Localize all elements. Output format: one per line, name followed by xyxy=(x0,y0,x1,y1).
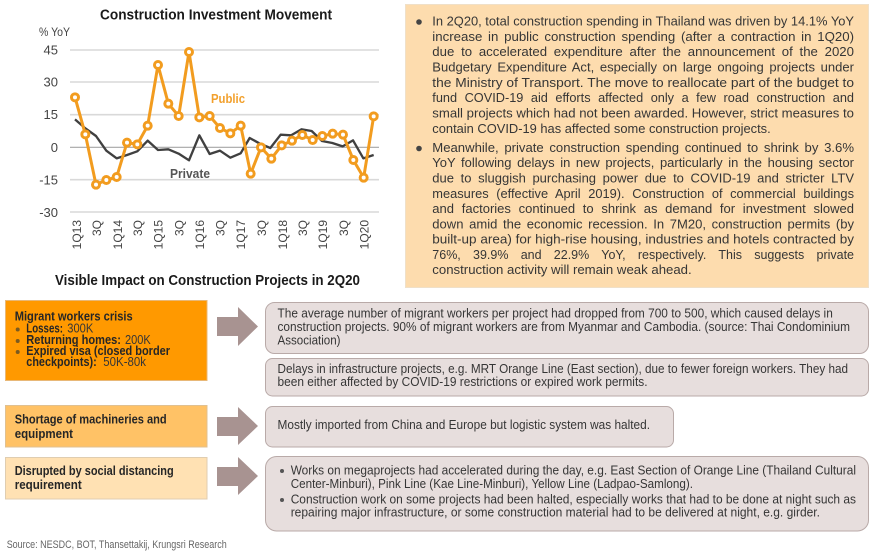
y axis labels: 0 xyxy=(51,140,58,155)
bullet paragraph: private spending: built-up area) for high-rise housing, industries and hotels contracted by xyxy=(432,232,855,247)
bullet paragraph: private spending: and factories continued to shrink as demand for investment slowed xyxy=(432,201,854,216)
x axis labels: 1Q17 xyxy=(234,220,248,249)
x axis labels: 3Q xyxy=(255,220,269,236)
panel: shortage of machineries xyxy=(6,406,207,447)
panel: migrant worker shortfall: Association) xyxy=(278,332,340,348)
x axis labels: 3Q xyxy=(131,220,145,236)
arrow: machineries xyxy=(217,407,258,445)
y axis labels: 45 xyxy=(44,42,58,58)
panel: infrastructure delays: been either affected by COVID-19 restrictions or expired work permits. xyxy=(278,374,648,389)
series label: public: Public xyxy=(211,91,245,106)
x axis labels: 3Q xyxy=(90,220,104,236)
public series markers xyxy=(71,48,377,188)
chart title: Construction Investment Movement xyxy=(100,8,332,24)
bullet paragraph: public spending: In 2Q20, total construction spending in Thailand was driven by 14.1% YoY xyxy=(432,14,854,28)
bullet paragraph: public spending: Budgetary Expenditure Act, especially on large ongoing projects under xyxy=(432,60,855,74)
x axis labels: 1Q15 xyxy=(152,220,166,249)
x axis labels: 1Q20 xyxy=(358,220,372,249)
y axis labels: 30 xyxy=(44,74,58,90)
x axis labels: 3Q xyxy=(296,220,310,236)
x axis labels: 1Q13 xyxy=(70,220,84,249)
bullet paragraph: private spending: Meanwhile, private construction spending continued to shrink by 3.6% xyxy=(432,140,854,155)
source note: Source: NESDC, BOT, Thansettakij, Krungsri Research xyxy=(7,539,227,551)
arrow: social distancing xyxy=(217,457,258,495)
bullet paragraph: public spending: increase in public construction spending (after a contraction in 1Q20) xyxy=(432,29,854,44)
panel: migrant worker shortfall: The average number of migrant workers per project had dropped from 700 to 500, which caused delays in xyxy=(278,306,833,320)
bullet paragraph: public spending: contain COVID-19 has affected some construction projects. xyxy=(432,121,771,136)
bullet paragraph: public spending: fund COVID-19 aid efforts affected only a few road construction and xyxy=(432,90,854,105)
x axis labels xyxy=(70,220,372,249)
panel: megaprojects and night work xyxy=(266,456,868,531)
line chart: construction investment xyxy=(39,25,379,249)
x axis labels: 3Q xyxy=(337,220,351,236)
x axis labels: 1Q18 xyxy=(276,220,290,249)
section heading: Visible Impact on Construction Projects in 2Q20 xyxy=(55,273,360,289)
panel: migrant workers crisis: Losses: xyxy=(26,320,63,336)
x axis labels: 1Q19 xyxy=(316,220,330,249)
bullet paragraph: private spending: measures (effective April 2019). Construction of commercial buildings xyxy=(432,186,854,201)
bullet paragraph: public spending: small projects which had not been awarded. However, strict measures to xyxy=(432,105,854,120)
bullet paragraph: private spending: YoY following delays in new projects, particularly in the housing sector xyxy=(432,155,855,170)
x axis labels: 3Q xyxy=(214,220,228,236)
panel: migrant workers crisis xyxy=(6,300,207,380)
x axis labels: 3Q xyxy=(172,220,186,236)
x axis labels: 1Q16 xyxy=(193,220,207,249)
panel: megaprojects and night work: Center-Minburi), Pink Line (Kae Line-Minburi), Yellow Line (Ladpao-Samlong). xyxy=(291,476,693,491)
panel: infrastructure delays xyxy=(266,358,868,396)
y axis unit: % YoY xyxy=(39,25,70,39)
y axis labels: 15 xyxy=(44,107,58,122)
panel: migrant workers crisis: Returning homes: xyxy=(26,332,121,347)
panel: shortage of machineries: equipment xyxy=(15,426,74,441)
panel: migrant workers crisis: checkpoints): xyxy=(26,354,97,369)
panel: social distancing: requirement xyxy=(15,477,82,492)
bullet paragraph: public spending xyxy=(416,14,855,136)
private series line xyxy=(75,119,374,160)
panel: migrant workers crisis: Migrant workers crisis xyxy=(15,308,133,324)
y axis labels: -30 xyxy=(39,205,58,220)
bullet paragraph: private spending: due to sluggish purchasing power due to COVID-19 and stricter LTV xyxy=(432,170,854,186)
y axis labels xyxy=(39,42,58,220)
bullet paragraph: private spending: 76%, 39.9% and 22.9% YoY, respectively. This suggests private xyxy=(432,247,854,262)
bullet paragraph: public spending: the Ministry of Transport. The move to reallocate part of the budget to xyxy=(432,75,854,90)
x axis labels: 1Q14 xyxy=(111,220,125,249)
arrow: migrant workers xyxy=(217,307,258,346)
y axis labels: -15 xyxy=(39,172,58,188)
panel: social distancing xyxy=(6,458,207,499)
panel: shortage of machineries: Shortage of machineries and xyxy=(15,412,167,426)
panel: migrant workers crisis: 50K-80k xyxy=(103,354,147,369)
bullet paragraph: private spending xyxy=(416,140,855,277)
panel: megaprojects and night work: repairing major infrastructure, or some construction material had to be delivered at night, e.g. girder. xyxy=(291,504,820,520)
public series line xyxy=(75,52,374,185)
panel: migrant workers crisis: Expired visa (closed border xyxy=(26,343,170,358)
panel: imports halted: Mostly imported from China and Europe but logistic system was halted. xyxy=(278,417,650,432)
panel: imports halted xyxy=(266,406,674,447)
panel: commentary xyxy=(406,4,868,288)
bullet paragraph: private spending: construction activity will remain weak ahead. xyxy=(432,262,692,277)
series label: private: Private xyxy=(170,166,210,181)
panel: social distancing: Disrupted by social distancing xyxy=(15,463,174,478)
panel: migrant workers crisis: 200K xyxy=(125,332,151,347)
bullet paragraph: public spending: due to accelerated expenditure after the announcement of the 2020 xyxy=(432,44,854,59)
bullet paragraph: private spending: down amid the economic recession. In 7M20, construction permits (by xyxy=(432,216,855,232)
panel: migrant workers crisis: 300K xyxy=(67,320,94,336)
panel: migrant worker shortfall xyxy=(266,302,868,354)
